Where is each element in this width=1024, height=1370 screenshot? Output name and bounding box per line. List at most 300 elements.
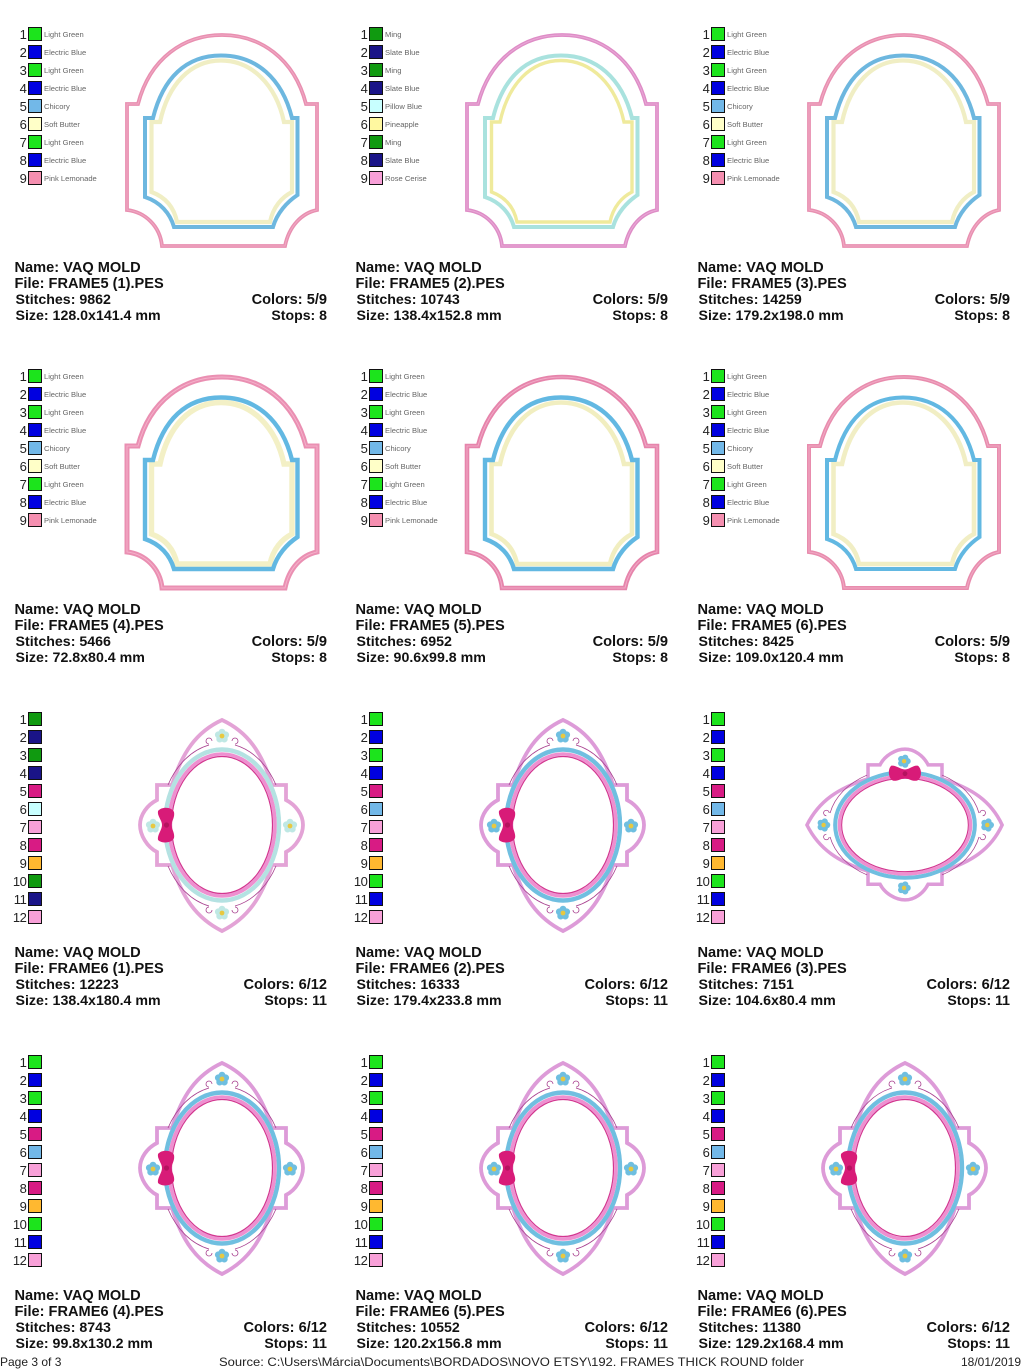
design details: File: FRAME6 (5).PES (356, 1304, 505, 1320)
color legend: Electric Blue (727, 84, 769, 93)
color legend: 8 (703, 838, 710, 853)
color legend: 2 (20, 45, 27, 60)
color legend: 2 (361, 1073, 368, 1088)
color legend: Chicory (44, 444, 70, 453)
panel: FRAME6 (6) (696, 1055, 1010, 1352)
footer: 18/01/2019 (961, 1355, 1021, 1369)
color legend: 2 (703, 1073, 710, 1088)
design details (698, 602, 1010, 666)
color legend: Light Green (44, 372, 84, 381)
design details: Size: 128.0x141.4 mm (16, 308, 161, 324)
color legend: Electric Blue (727, 156, 769, 165)
color legend: Pineapple (385, 120, 419, 129)
color legend: 2 (20, 387, 27, 402)
color legend: Slate Blue (385, 156, 420, 165)
design details: Stitches: 16333 (356, 977, 460, 993)
color legend: 2 (361, 45, 368, 60)
color legend: 1 (361, 27, 368, 42)
color legend: Light Green (727, 66, 767, 75)
color legend: 11 (697, 892, 710, 907)
footer: Page 3 of 3 (0, 1355, 62, 1369)
color legend: 7 (703, 477, 710, 492)
color legend: 6 (20, 117, 27, 132)
design details: Stops: 8 (612, 307, 668, 323)
color legend: 8 (20, 1181, 27, 1196)
color legend: 9 (20, 513, 27, 528)
design details: Stitches: 8743 (16, 1320, 111, 1336)
design details: Size: 90.6x99.8 mm (356, 650, 486, 666)
color legend: 9 (703, 171, 710, 186)
design details: Size: 129.2x168.4 mm (698, 1336, 844, 1352)
frame design (140, 720, 303, 931)
color legend: 6 (703, 1145, 710, 1160)
color legend: Electric Blue (727, 498, 769, 507)
design details: File: FRAME6 (2).PES (356, 961, 505, 977)
frame design (127, 377, 317, 588)
color legend: 1 (703, 1055, 710, 1070)
color legend: 7 (361, 1163, 368, 1178)
color legend: Pink Lemonade (44, 174, 97, 183)
design details: Name: VAQ MOLD (14, 1288, 141, 1304)
color legend: 1 (703, 712, 710, 727)
color legend: Pink Lemonade (727, 516, 780, 525)
color legend: Soft Butter (727, 120, 763, 129)
design details: Colors: 6/12 (584, 977, 668, 993)
color legend: 10 (354, 874, 368, 889)
design details (14, 1288, 327, 1352)
color legend: 6 (703, 117, 710, 132)
color legend: Electric Blue (385, 498, 427, 507)
panel: FRAME5 (6) (698, 369, 1010, 666)
design details: Size: 109.0x120.4 mm (698, 650, 844, 666)
panel: FRAME6 (3) (696, 712, 1010, 1009)
color legend: 1 (20, 369, 27, 384)
color legend: 7 (703, 1163, 710, 1178)
frame design (823, 1063, 986, 1274)
color legend: 10 (696, 874, 710, 889)
color legend: 1 (703, 27, 710, 42)
color legend: 6 (361, 117, 368, 132)
color legend: 6 (361, 802, 368, 817)
color legend: Light Green (727, 408, 767, 417)
design details: Stops: 11 (605, 992, 668, 1008)
design details (356, 260, 668, 324)
color legend: 5 (361, 784, 368, 799)
color legend (361, 27, 427, 186)
design details: File: FRAME5 (2).PES (356, 276, 505, 292)
color legend: 11 (14, 892, 27, 907)
panel: FRAME5 (5) (356, 369, 668, 666)
panel: FRAME5 (4) (14, 369, 327, 666)
color legend: 8 (20, 838, 27, 853)
design details: File: FRAME5 (3).PES (698, 276, 847, 292)
color legend (361, 369, 438, 528)
color legend: 9 (361, 171, 368, 186)
color legend: 3 (20, 405, 27, 420)
color legend: Soft Butter (727, 462, 763, 471)
design details: File: FRAME6 (1).PES (14, 961, 164, 977)
color legend: 3 (20, 748, 27, 763)
color legend: Electric Blue (727, 48, 769, 57)
color legend: Electric Blue (44, 426, 86, 435)
design details: Stops: 11 (947, 1335, 1010, 1351)
color legend: 4 (361, 81, 368, 96)
color legend: 9 (361, 513, 368, 528)
frame design, rotated with bow on top (807, 749, 1002, 900)
color legend: 2 (20, 730, 27, 745)
color legend: Light Green (44, 66, 84, 75)
color legend: Soft Butter (44, 462, 80, 471)
panel: FRAME5 (1) (14, 27, 327, 324)
design details: Stitches: 6952 (356, 634, 452, 650)
color legend: 2 (703, 730, 710, 745)
design details: Colors: 6/12 (926, 1320, 1010, 1336)
color legend: 4 (20, 423, 27, 438)
color legend: 4 (20, 766, 27, 781)
design details: File: FRAME5 (5).PES (356, 618, 505, 634)
color legend: 5 (361, 99, 368, 114)
color legend: Pillow Blue (385, 102, 422, 111)
color legend: 8 (361, 153, 368, 168)
color legend: Light Green (385, 372, 425, 381)
color legend: Light Green (44, 480, 84, 489)
frame design (127, 35, 317, 246)
design details: File: FRAME5 (4).PES (14, 618, 164, 634)
color legend: Light Green (727, 480, 767, 489)
color legend: 11 (14, 1235, 27, 1250)
color legend: 6 (20, 1145, 27, 1160)
design details: Colors: 6/12 (243, 1320, 327, 1336)
color legend: 8 (361, 1181, 368, 1196)
design details: Stitches: 8425 (698, 634, 794, 650)
color legend (354, 712, 382, 925)
color legend: Chicory (727, 444, 753, 453)
color legend: 7 (20, 820, 27, 835)
color legend: Electric Blue (385, 390, 427, 399)
color legend: 6 (703, 802, 710, 817)
color legend: 4 (361, 1109, 368, 1124)
color legend: Chicory (727, 102, 753, 111)
design details (14, 945, 327, 1009)
color legend: 12 (13, 1253, 27, 1268)
color legend: 4 (703, 81, 710, 96)
design details: Stops: 8 (271, 307, 327, 323)
color legend: 8 (20, 153, 27, 168)
design details: Stitches: 10743 (356, 292, 460, 308)
color legend: 3 (703, 63, 710, 78)
color legend: 7 (703, 820, 710, 835)
design details (14, 260, 327, 324)
color legend (696, 712, 724, 925)
color legend: 6 (20, 802, 27, 817)
design details: Size: 179.4x233.8 mm (356, 993, 502, 1009)
color legend: Chicory (44, 102, 70, 111)
design details (14, 602, 327, 666)
color legend: Light Green (44, 408, 84, 417)
color legend: 3 (361, 1091, 368, 1106)
design details (698, 945, 1010, 1009)
design details: Size: 72.8x80.4 mm (16, 650, 145, 666)
design details (698, 1288, 1010, 1352)
color legend: Electric Blue (44, 84, 86, 93)
design details (356, 945, 668, 1009)
frame design (140, 1063, 303, 1274)
design details: Colors: 5/9 (935, 292, 1010, 308)
color legend: 9 (20, 856, 27, 871)
color legend (13, 712, 42, 925)
design details: File: FRAME6 (6).PES (698, 1304, 847, 1320)
design details: Size: 120.2x156.8 mm (356, 1336, 502, 1352)
design details: Colors: 5/9 (252, 292, 327, 308)
color legend: 9 (20, 1199, 27, 1214)
panel: FRAME6 (4) (13, 1055, 327, 1352)
design details: Size: 179.2x198.0 mm (698, 308, 844, 324)
color legend: 5 (361, 441, 368, 456)
design details: Stitches: 14259 (698, 292, 802, 308)
color legend: 1 (20, 27, 27, 42)
color legend: 10 (354, 1217, 368, 1232)
color legend: 5 (703, 441, 710, 456)
color legend: 7 (361, 135, 368, 150)
color legend (20, 369, 97, 528)
design details: Stops: 8 (954, 649, 1010, 665)
color legend: 4 (361, 423, 368, 438)
color legend: 3 (20, 1091, 27, 1106)
color legend: 5 (703, 99, 710, 114)
frame design (481, 720, 644, 931)
color legend: 4 (703, 1109, 710, 1124)
color legend: Light Green (385, 480, 425, 489)
design details: File: FRAME6 (4).PES (14, 1304, 164, 1320)
design details: Colors: 5/9 (593, 292, 668, 308)
frame design (809, 377, 999, 588)
color legend: Light Green (44, 30, 84, 39)
color legend: 12 (13, 910, 27, 925)
color legend: 9 (361, 1199, 368, 1214)
color legend: 1 (703, 369, 710, 384)
design details: Stops: 8 (612, 649, 668, 665)
color legend: Soft Butter (385, 462, 421, 471)
color legend: 3 (361, 748, 368, 763)
design details: Name: VAQ MOLD (698, 1288, 824, 1304)
frame design (481, 1063, 644, 1274)
design details: File: FRAME5 (6).PES (698, 618, 847, 634)
color legend: 5 (361, 1127, 368, 1142)
color legend: Pink Lemonade (385, 516, 438, 525)
design details: Name: VAQ MOLD (356, 602, 482, 618)
color legend: 8 (20, 495, 27, 510)
footer: Source: C:\Users\Márcia\Documents\BORDADOS\NOVO ETSY\192. FRAMES THICK ROUND folder (219, 1355, 804, 1369)
color legend: 6 (20, 459, 27, 474)
color legend: 6 (361, 459, 368, 474)
design details: Stops: 11 (947, 992, 1010, 1008)
color legend: 7 (20, 1163, 27, 1178)
design details: File: FRAME5 (1).PES (14, 276, 164, 292)
color legend: 2 (20, 1073, 27, 1088)
panel: FRAME5 (3) (698, 27, 1010, 324)
design details: Stitches: 7151 (698, 977, 794, 993)
design details (356, 602, 668, 666)
color legend: 12 (696, 910, 710, 925)
design details: Stitches: 12223 (16, 977, 119, 993)
design details: Name: VAQ MOLD (14, 260, 141, 276)
frame design (467, 35, 657, 246)
color legend (354, 1055, 382, 1268)
color legend: 4 (703, 766, 710, 781)
color legend: 6 (361, 1145, 368, 1160)
color legend: Pink Lemonade (727, 174, 780, 183)
design details: Stops: 11 (264, 1335, 327, 1351)
color legend: Light Green (727, 372, 767, 381)
design details: Name: VAQ MOLD (14, 945, 141, 961)
color legend: 4 (361, 766, 368, 781)
design details: Name: VAQ MOLD (698, 602, 824, 618)
color legend: 3 (361, 405, 368, 420)
panel: FRAME6 (1) (13, 712, 327, 1009)
design details: Name: VAQ MOLD (356, 945, 482, 961)
color legend: 10 (13, 1217, 27, 1232)
color legend: Chicory (385, 444, 411, 453)
color legend: 7 (361, 477, 368, 492)
color legend: 3 (20, 63, 27, 78)
design details: Name: VAQ MOLD (698, 260, 824, 276)
design details: Name: VAQ MOLD (698, 945, 824, 961)
design details: Size: 99.8x130.2 mm (16, 1336, 153, 1352)
design details: Stitches: 10552 (356, 1320, 460, 1336)
color legend: Electric Blue (44, 498, 86, 507)
color legend: Slate Blue (385, 48, 420, 57)
color legend: Ming (385, 30, 401, 39)
color legend: Slate Blue (385, 84, 420, 93)
design details: Name: VAQ MOLD (14, 602, 141, 618)
color legend: Electric Blue (44, 48, 86, 57)
color legend: 3 (361, 63, 368, 78)
color legend: 3 (703, 405, 710, 420)
color legend: 11 (697, 1235, 710, 1250)
color legend: 7 (361, 820, 368, 835)
color legend: 5 (703, 784, 710, 799)
color legend: Light Green (727, 30, 767, 39)
design details: Stitches: 9862 (16, 292, 111, 308)
panel: FRAME6 (5) (354, 1055, 668, 1352)
color legend: 1 (361, 369, 368, 384)
color legend: 2 (703, 45, 710, 60)
design details: Colors: 6/12 (243, 977, 327, 993)
color legend: 1 (20, 1055, 27, 1070)
frame design (467, 377, 657, 588)
design details: Colors: 6/12 (926, 977, 1010, 993)
color legend: Electric Blue (44, 390, 86, 399)
color legend: Light Green (727, 138, 767, 147)
color legend (696, 1055, 724, 1268)
color legend: 7 (20, 477, 27, 492)
color legend: 12 (696, 1253, 710, 1268)
color legend: 9 (703, 856, 710, 871)
color legend: Electric Blue (385, 426, 427, 435)
color legend: 1 (20, 712, 27, 727)
color legend (13, 1055, 42, 1268)
color legend (20, 27, 97, 186)
color legend: 9 (20, 171, 27, 186)
color legend: 10 (13, 874, 27, 889)
design details: Stops: 11 (264, 992, 327, 1008)
color legend: 4 (20, 81, 27, 96)
color legend: 4 (703, 423, 710, 438)
panel: FRAME6 (2) (354, 712, 668, 1009)
color legend: 9 (361, 856, 368, 871)
color legend: 8 (703, 153, 710, 168)
design details: Name: VAQ MOLD (356, 260, 482, 276)
color legend: Electric Blue (727, 426, 769, 435)
color legend: 9 (703, 513, 710, 528)
design details: Colors: 5/9 (935, 634, 1010, 650)
design details: Size: 138.4x152.8 mm (356, 308, 502, 324)
color legend (703, 369, 780, 528)
design details: Colors: 5/9 (593, 634, 668, 650)
design details: Stops: 8 (271, 649, 327, 665)
color legend: 7 (20, 135, 27, 150)
design details: File: FRAME6 (3).PES (698, 961, 847, 977)
design details: Name: VAQ MOLD (356, 1288, 482, 1304)
color legend: 1 (361, 712, 368, 727)
panel: FRAME5 (2) (356, 27, 668, 324)
color legend: 2 (361, 730, 368, 745)
color legend: Electric Blue (727, 390, 769, 399)
color legend: 9 (703, 1199, 710, 1214)
color legend: Electric Blue (44, 156, 86, 165)
color legend: 4 (20, 1109, 27, 1124)
footer (0, 1355, 1021, 1369)
color legend: 5 (20, 1127, 27, 1142)
design details: Size: 104.6x80.4 mm (698, 993, 836, 1009)
color legend: Rose Cerise (385, 174, 427, 183)
design details (356, 1288, 668, 1352)
color legend: Light Green (385, 408, 425, 417)
design details: Colors: 6/12 (584, 1320, 668, 1336)
color legend: 11 (355, 892, 368, 907)
design details: Stitches: 5466 (16, 634, 111, 650)
color legend: 5 (20, 784, 27, 799)
color legend: 6 (703, 459, 710, 474)
color legend: Light Green (44, 138, 84, 147)
color legend: 10 (696, 1217, 710, 1232)
design details: Stitches: 11380 (698, 1320, 801, 1336)
frame design (809, 35, 999, 246)
color legend: 2 (361, 387, 368, 402)
color legend: 5 (20, 99, 27, 114)
design details: Stops: 11 (605, 1335, 668, 1351)
color legend: 3 (703, 748, 710, 763)
color legend: 5 (20, 441, 27, 456)
color legend: Ming (385, 138, 401, 147)
color legend: 8 (703, 1181, 710, 1196)
color legend: 11 (355, 1235, 368, 1250)
design details: Stops: 8 (954, 307, 1010, 323)
color legend: 1 (361, 1055, 368, 1070)
design details: Size: 138.4x180.4 mm (16, 993, 161, 1009)
color legend: 8 (361, 495, 368, 510)
color legend: 8 (361, 838, 368, 853)
design details (698, 260, 1010, 324)
color legend: Ming (385, 66, 401, 75)
design details: Colors: 5/9 (252, 634, 327, 650)
color legend: 12 (354, 1253, 368, 1268)
color legend: 5 (703, 1127, 710, 1142)
color legend: Soft Butter (44, 120, 80, 129)
color legend: 3 (703, 1091, 710, 1106)
color legend: 7 (703, 135, 710, 150)
color legend: 2 (703, 387, 710, 402)
